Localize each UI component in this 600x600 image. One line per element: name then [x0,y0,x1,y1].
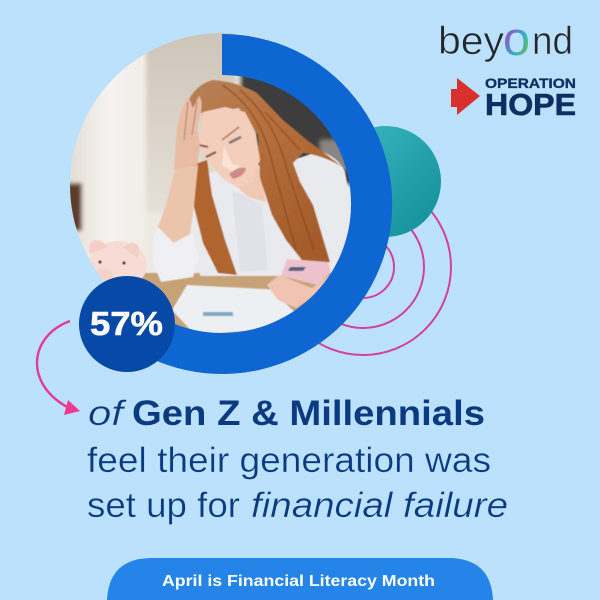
shirt [193,151,351,276]
logo: Operation Hope: HOPE [485,88,576,122]
line 3 [87,486,508,525]
logo: beyond: bey [438,20,505,63]
red arrow [451,78,480,115]
teal circle [330,126,441,237]
bottom pill banner: April is Financial Literacy Month [162,573,435,590]
face [198,107,260,188]
line 1: Gen Z & Millennials [132,394,485,433]
eyes [229,137,241,143]
piggy bank [89,240,147,282]
neck [238,166,266,202]
concentric pink arcs [275,179,451,355]
pink curved arrow [37,321,80,415]
bottom pill banner [107,558,493,600]
line 1: of [88,394,127,433]
paper [172,285,295,335]
nose shadow [222,146,240,172]
woman [153,80,351,335]
hand on forehead [174,96,202,170]
stat badge [79,276,175,372]
eyebrows [222,127,239,140]
hand holding phone [267,274,331,308]
line 2: feel their generation was [87,441,491,480]
lips [229,168,246,179]
phone [281,259,331,285]
line 3: set up for [87,486,240,525]
logo: Operation Hope: OPERATION [485,75,576,91]
stat badge: 57% [90,305,163,342]
logo: beyond: nd [532,20,573,63]
table [142,272,332,333]
line 3: financial failure [251,486,508,525]
photo background [70,33,352,282]
logo: Operation Hope [451,75,576,122]
sleeve [153,227,199,282]
logo: beyond [438,12,573,65]
headline [87,394,508,525]
hair strands [222,85,314,250]
logo: beyond: o [503,12,530,65]
hair top and right side [187,80,343,264]
circular photo: stressed woman with piggy bank and phone [70,33,352,333]
donut progress ring 57% [150,34,392,374]
hair left side [193,160,237,275]
forearm [158,165,198,243]
shirt placket shading [232,190,268,272]
